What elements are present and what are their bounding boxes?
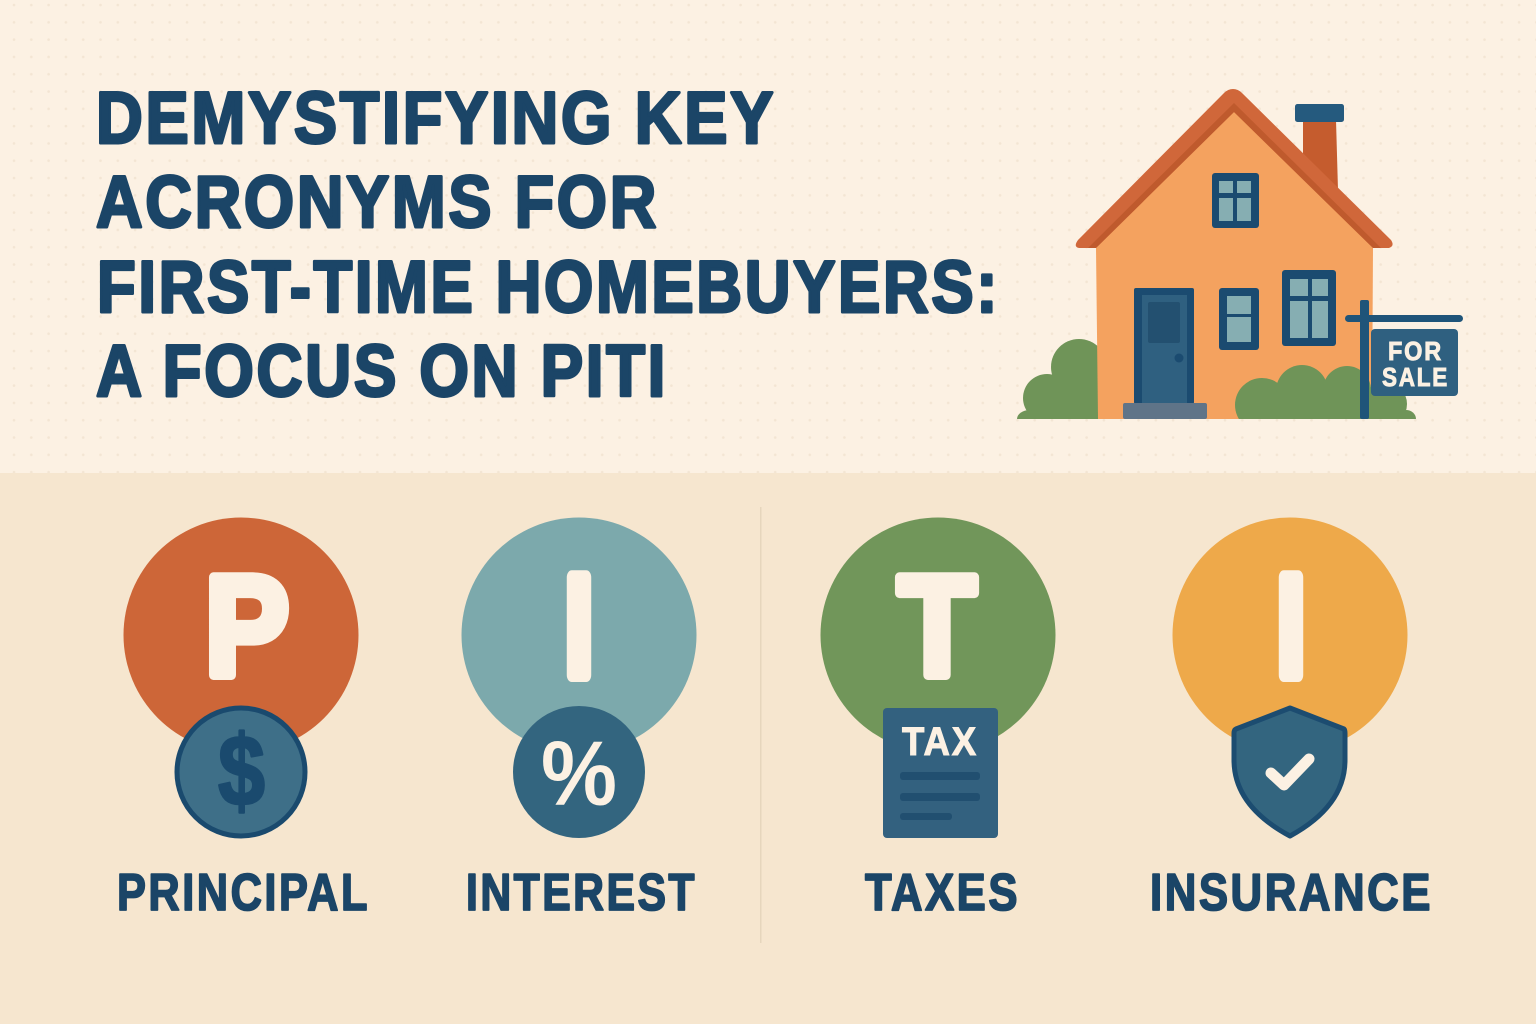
title <box>96 78 1000 412</box>
icon: T circle <box>820 518 1056 752</box>
icon: upper window <box>1212 173 1259 228</box>
icon: chimney <box>1295 104 1344 190</box>
icon: for sale sign: SALE <box>1382 362 1449 392</box>
icon: tax document <box>883 708 998 838</box>
icon: shield with check <box>1234 708 1345 836</box>
icon: roof <box>1076 89 1393 248</box>
panel: PITI background <box>0 473 1536 1024</box>
panel: interest <box>462 518 697 922</box>
icon: door <box>1134 288 1194 404</box>
label: principal: PRINCIPAL <box>117 864 370 922</box>
icon: I circle <box>462 518 696 752</box>
panel: taxes <box>820 518 1056 922</box>
icon: percent coin <box>513 706 645 838</box>
icon: T circle: T <box>898 547 976 706</box>
icon: house wall <box>1096 105 1373 419</box>
title: FIRST-TIME HOMEBUYERS: <box>97 247 1000 328</box>
icon: right bush <box>1235 365 1416 419</box>
label: interest: INTEREST <box>466 864 697 922</box>
icon: P circle <box>124 518 358 752</box>
illustration: house for sale <box>1017 89 1463 432</box>
icon: tax document: TAX <box>902 720 978 764</box>
icon: I circle <box>1172 518 1408 752</box>
icon: left bush <box>1017 339 1098 419</box>
icon: sign post <box>1345 300 1463 419</box>
icon: middle window <box>1219 288 1259 350</box>
label: taxes: TAXES <box>865 864 1020 922</box>
divider <box>760 507 762 943</box>
icon: percent coin: % <box>541 723 617 825</box>
title: A FOCUS ON PITI <box>96 331 668 412</box>
icon: right window <box>1282 270 1336 346</box>
icon: I circle: I <box>1277 547 1305 706</box>
icon: dollar coin: $ <box>218 715 265 827</box>
icon: door step <box>1123 403 1207 419</box>
icon: dollar coin <box>177 708 305 836</box>
icon: P circle: P <box>205 547 289 706</box>
panel: principal <box>117 518 370 922</box>
title: DEMYSTIFYING KEY <box>96 78 776 159</box>
icon: for sale sign: FOR <box>1388 336 1443 366</box>
label: insurance: INSURANCE <box>1150 864 1433 922</box>
panel: header background <box>0 0 1536 473</box>
icon: for sale sign <box>1371 329 1458 396</box>
icon: I circle: I <box>565 547 593 706</box>
title: ACRONYMS FOR <box>96 162 659 243</box>
panel: insurance <box>1150 518 1433 922</box>
